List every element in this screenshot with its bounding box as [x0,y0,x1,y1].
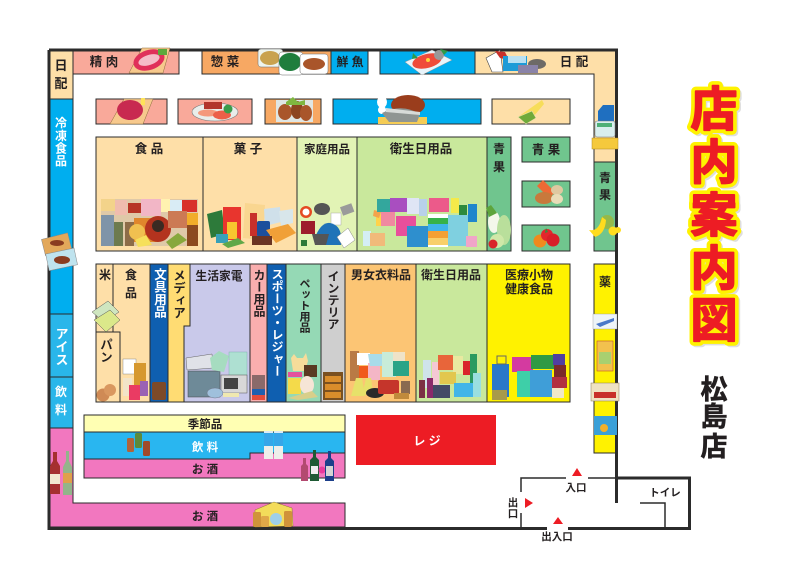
labels: entrance: 出入口 [541,530,573,543]
icon: entrance arrow [572,468,582,476]
labels: perimeter [54,54,611,417]
icon: vegetables left [486,205,511,248]
store walls [49,50,690,528]
title: store guide: 内 [690,136,738,189]
title: store guide: 店 [690,83,738,136]
labels: lower aisle: 男女衣料品 [351,267,411,282]
icon: vegetable pack [518,100,544,124]
labels: perimeter: 冷 [55,115,67,130]
icon: snacks cluster [207,203,296,248]
icon: food cluster [101,199,198,249]
icon: beer cases [253,502,293,527]
icon: clothing [350,351,410,399]
labels: perimeter: 精 肉 [90,54,118,69]
icon: ham plate [192,102,238,121]
icon: stationery basket [152,382,166,400]
labels: perimeter: アイス [54,327,68,366]
labels: perimeter: 日 配 [560,55,589,69]
icon: interior chest [323,372,343,400]
icon: meat on board, top [129,46,170,74]
labels: perimeter: 料 [55,402,67,417]
icon: root vegetables [535,180,563,204]
title: store guide: 内 [690,242,738,295]
labels: upper aisle: 青 果 [532,142,561,157]
labels: upper aisle: 果 [493,160,505,174]
title: store guide: 案 [690,189,738,242]
store name: 島 [700,402,728,432]
icon: frozen food packs [41,233,78,271]
labels: upper aisle: 食 品 [135,141,163,156]
labels: lower aisle: 医療小物 [505,267,553,282]
labels: lower aisle: 衛生日用品 [421,267,481,282]
labels: front shelves: 季節品 [188,417,222,431]
labels: upper aisle: 青 [493,141,505,156]
icon: food jars [123,359,148,400]
title: store guide: 案 [692,191,740,244]
title: store guide: 内 [692,244,740,297]
labels: perimeter: 品 [55,154,67,168]
panel: register [356,415,496,465]
icon: melon and bananas [589,215,621,237]
icon: sashimi platter [405,49,452,75]
icon: water bottles [264,431,283,459]
icon: fried chicken [276,97,313,122]
icon: main entrance arrow [553,517,563,524]
icon: medicine boxes [591,314,619,435]
title: store guide: 図 [692,296,740,349]
labels: lower aisle: 米 [99,267,111,282]
title: store guide: 店 [692,85,740,138]
labels: upper aisle: 衛生日用品 [390,141,452,156]
icon: car goods [252,375,265,400]
icon: rice bags [92,301,120,332]
icon: exit arrow [525,498,533,508]
labels: lower aisle: 生活家電 [195,269,243,283]
icon: toiletries cluster [363,198,477,247]
labels: perimeter: 鮮 魚 [336,54,364,69]
labels: lower aisle: 品 [125,286,137,300]
icon: drink cans [127,433,150,456]
labels: entrance: 口 [508,508,518,520]
labels: perimeter: 飲 [55,384,67,399]
labels: lower aisle: メディア [171,269,185,319]
labels: lower aisle: 健康食品 [505,281,553,296]
labels: upper aisle [135,141,561,174]
panel: lower aisle shelves [96,264,570,402]
title: store guide: 内 [692,138,740,191]
labels: front shelves [188,417,441,523]
icon: household goods [300,203,355,248]
labels: perimeter: 配 [54,76,68,91]
store name [700,375,728,462]
icon: fruit [534,228,560,248]
icon: daily goods top [486,50,546,73]
store name: 松 [700,375,728,405]
icon: side dish plates [258,49,328,75]
panel: perimeter shelves [50,50,616,527]
labels: entrance [508,482,681,543]
labels: entrance: トイレ [649,487,681,499]
labels: front shelves: レ ジ [413,434,441,448]
labels: perimeter: 惣 菜 [211,54,240,69]
icon: pet goods [288,353,318,400]
icon: medical products [492,354,567,400]
title: store guide: 図 [690,294,738,347]
store name: 店 [700,432,728,462]
labels: front shelves: お 酒 [192,509,219,523]
labels: lower aisle: スポーツ・レジャー [270,268,284,377]
labels: front shelves: 飲 料 [192,440,219,454]
labels: entrance: 出 [508,496,518,509]
title: store guide: 内 [690,242,738,295]
labels: lower aisle [98,267,553,377]
icon: wine and liquor bottles [301,450,334,481]
labels: perimeter: 薬 [599,274,611,289]
icon: dairy right [592,105,618,149]
labels: upper aisle: 家庭用品 [304,142,350,156]
labels: perimeter: 青 [599,170,611,185]
icon: home appliances [186,351,247,398]
labels: entrance: 入口 [566,482,586,494]
icon: sake bottles [50,451,72,495]
title: store guide: 案 [690,189,738,242]
labels: perimeter: 果 [599,188,611,202]
icon: fish and crab [377,95,427,124]
labels: front shelves: お 酒 [192,462,219,476]
panel: second row shelves [96,99,570,124]
labels: perimeter: 日 [54,58,68,73]
panel: upper aisle shelves [96,137,570,251]
title: store guide [690,83,740,349]
labels: lower aisle: 文具用品 [152,267,166,318]
panel: seasonal, drinks and alcohol shelves [84,415,345,478]
labels: lower aisle: 食 [125,267,137,282]
labels: lower aisle: カー用品 [252,269,266,318]
title: store guide: 内 [690,136,738,189]
labels: lower aisle: パン [98,338,112,363]
labels: lower aisle: インテリア [326,270,340,330]
title: store guide: 店 [690,83,738,136]
labels: perimeter: 凍 [55,128,67,143]
labels: upper aisle: 菓 子 [234,141,263,156]
title: store guide: 図 [690,294,738,347]
icon: cosmetics [419,354,481,398]
icon: meat tray row 2 [110,98,153,124]
labels: lower aisle: ペット用品 [298,278,310,334]
labels: perimeter: 食 [55,140,67,156]
icon: bread rolls [96,384,116,402]
